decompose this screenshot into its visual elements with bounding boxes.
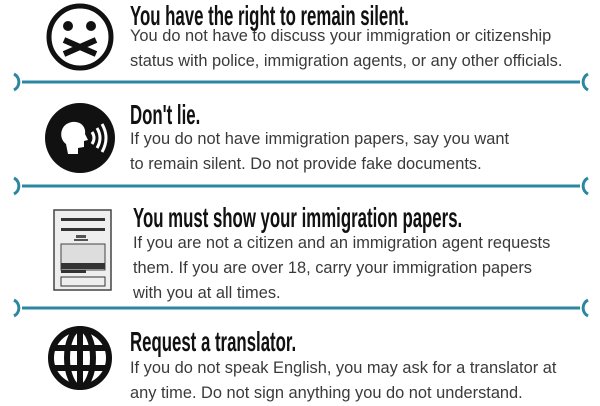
text 3 [133, 234, 550, 302]
heading 4: Request a translator. [130, 326, 296, 357]
text 4: any time. Do not sign anything you do not understand. [130, 384, 523, 402]
icon: globe [48, 326, 112, 390]
text 1 [130, 27, 562, 70]
text 2: If you do not have immigration papers, say you want [130, 130, 509, 148]
heading 3: You must show your immigration papers. [133, 202, 462, 233]
heading 1: You have the right to remain silent. [130, 0, 409, 31]
text 3: If you are not a citizen and an immigration agent requests [133, 234, 550, 252]
icon: document [53, 209, 112, 291]
text 3: them. If you are over 18, carry your immigration papers [133, 259, 532, 277]
icon: speaking head [45, 103, 115, 173]
heading 2: Don't lie. [130, 99, 200, 130]
text 3: with you at all times. [133, 284, 281, 302]
text 2 [130, 130, 509, 173]
text 1: status with police, immigration agents, or any other officials. [130, 52, 562, 70]
text 1: You do not have to discuss your immigration or citizenship [130, 27, 551, 45]
text 4: If you do not speak English, you may ask for a translator at [130, 359, 556, 377]
text 2: to remain silent. Do not provide fake documents. [130, 155, 482, 173]
icon: silent face [46, 4, 114, 70]
text 4 [130, 359, 556, 402]
